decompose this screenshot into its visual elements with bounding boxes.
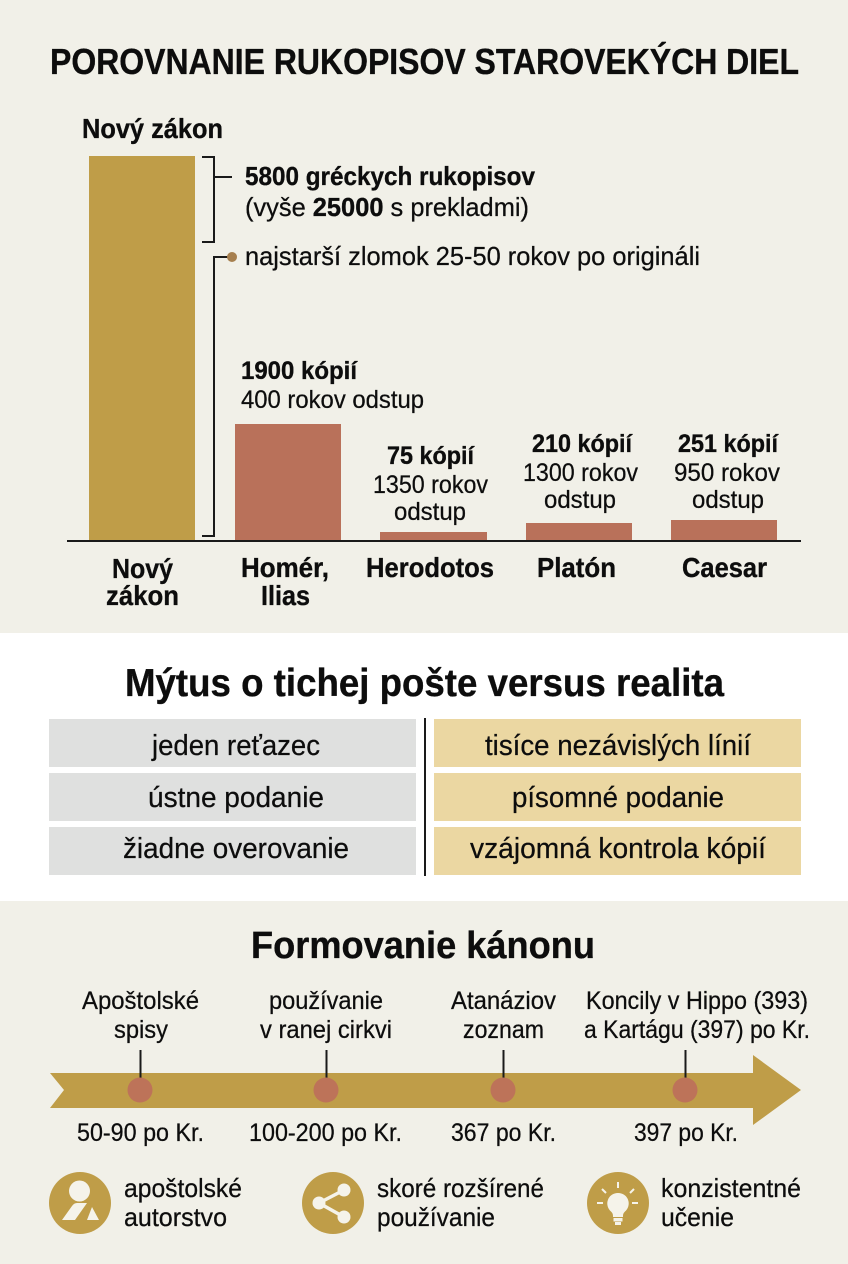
dot: oldest fragment <box>227 252 237 262</box>
reality column: písomné podanie <box>512 782 724 814</box>
timeline labels: zoznam <box>463 1016 544 1044</box>
reality column: vzájomná kontrola kópií <box>470 833 766 865</box>
text: apostolic authorship <box>124 1173 242 1232</box>
arrow: timeline <box>50 1055 801 1125</box>
bar: Herodotos: odstup <box>394 498 466 526</box>
bar: Herodotos: 75 kópií <box>387 442 475 470</box>
text: consistent teaching: učenie <box>661 1202 734 1232</box>
icon: share <box>302 1172 364 1234</box>
timeline labels: používanie <box>269 987 383 1015</box>
bar: Platón: 210 kópií <box>532 430 633 458</box>
text: manuscripts count: (vyše 25000 s prekladmi) <box>245 192 529 222</box>
axis labels: Homér, <box>241 552 329 583</box>
bar: Homér <box>235 357 424 541</box>
axis labels: Caesar <box>682 552 767 583</box>
axis labels: Nový <box>112 553 173 584</box>
bar: Caesar <box>671 430 780 541</box>
timeline dates: 397 po Kr. <box>634 1119 738 1147</box>
myth column: jeden reťazec <box>151 730 320 762</box>
axis labels: zákon <box>106 580 179 611</box>
text: apostolic authorship: apoštolské <box>124 1173 242 1203</box>
divider <box>424 718 426 876</box>
text: consistent teaching: konzistentné <box>661 1173 801 1203</box>
text: oldest fragment: najstarší zlomok 25-50 rokov po origináli <box>245 241 700 271</box>
timeline labels: Apoštolské <box>82 987 199 1015</box>
feature: consistent teaching <box>587 1172 801 1234</box>
timeline markers <box>128 1050 698 1102</box>
axis labels: Ilias <box>261 580 310 611</box>
bar: Homér: 400 rokov odstup <box>241 386 424 414</box>
panel: myth versus reality <box>0 633 848 901</box>
axis labels: Platón <box>537 552 616 583</box>
bracket: oldest fragment <box>202 257 230 536</box>
bracket: manuscripts count <box>202 157 232 242</box>
timeline labels: a Kartágu (397) po Kr. <box>584 1016 810 1044</box>
bar: Caesar: 950 rokov <box>674 459 780 487</box>
bar: Caesar: 251 kópií <box>678 430 779 458</box>
heading: canon: Formovanie kánonu <box>251 925 595 967</box>
myth column <box>49 719 416 875</box>
axis labels: Herodotos <box>366 552 494 583</box>
timeline labels: Koncily v Hippo (393) <box>586 987 808 1015</box>
text: early widespread use: používanie <box>377 1202 495 1232</box>
text: apostolic authorship: autorstvo <box>124 1202 227 1232</box>
timeline labels <box>82 987 810 1044</box>
bar: Herodotos <box>373 442 488 541</box>
bar: Nový zákon: Nový zákon <box>82 113 223 144</box>
bar: Platón <box>523 430 638 541</box>
bar: Caesar: odstup <box>692 486 764 514</box>
timeline dates: 50-90 po Kr. <box>77 1119 204 1147</box>
icon: light bulb <box>587 1172 649 1234</box>
panel: manuscript comparison <box>50 41 801 611</box>
text: consistent teaching <box>661 1173 801 1232</box>
reality column: tisíce nezávislých línií <box>485 730 751 762</box>
text: early widespread use: skoré rozšírené <box>377 1173 544 1203</box>
bar: Nový zákon <box>82 113 223 541</box>
timeline labels: Atanáziov <box>451 987 556 1015</box>
bar: Platón: 1300 rokov <box>523 459 638 487</box>
baseline axis <box>67 540 801 542</box>
reality column <box>434 719 801 875</box>
text: manuscripts count <box>245 161 536 222</box>
axis labels <box>106 552 767 611</box>
timeline dates <box>77 1119 738 1147</box>
heading: myth: Mýtus o tichej pošte versus realita <box>125 662 724 705</box>
bar chart <box>67 113 801 611</box>
timeline labels: v ranej cirkvi <box>260 1016 392 1044</box>
bar: Homér: 1900 kópií <box>241 357 358 385</box>
text: manuscripts count: 5800 gréckych rukopisov <box>245 161 536 191</box>
text: early widespread use <box>377 1173 544 1232</box>
timeline labels: spisy <box>114 1016 168 1044</box>
myth column: žiadne overovanie <box>123 833 349 865</box>
myth column: ústne podanie <box>148 782 324 814</box>
feature: apostolic authorship <box>49 1172 242 1234</box>
timeline dates: 100-200 po Kr. <box>249 1119 402 1147</box>
timeline dates: 367 po Kr. <box>451 1119 556 1147</box>
bar: Herodotos: 1350 rokov <box>373 471 488 499</box>
feature: early widespread use <box>302 1172 544 1234</box>
icon: person <box>49 1172 111 1234</box>
panel: canon formation <box>49 925 810 1234</box>
bar: Platón: odstup <box>544 486 616 514</box>
